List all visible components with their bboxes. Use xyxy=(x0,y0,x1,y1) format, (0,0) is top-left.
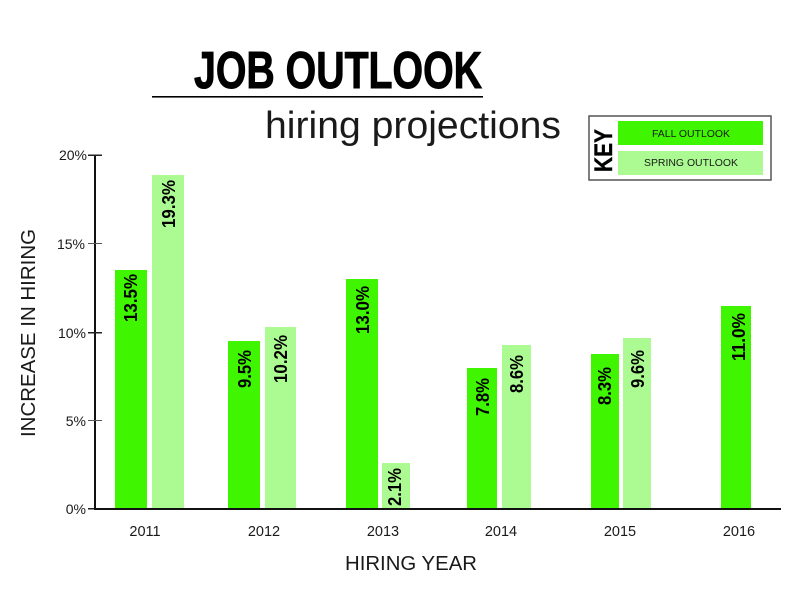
year group 2012 xyxy=(228,327,296,540)
title: JOB OUTLOOK xyxy=(194,42,482,100)
year group 2015: 8.3% xyxy=(595,367,615,405)
year group 2016: 2016 xyxy=(723,524,755,540)
year group 2014: 7.8% xyxy=(473,378,493,416)
y axis: 10% xyxy=(58,325,86,341)
y axis: 0% xyxy=(66,501,86,517)
key heading: KEY xyxy=(590,129,618,172)
y axis xyxy=(57,147,102,517)
y axis: 5% xyxy=(66,413,86,429)
year group 2013 xyxy=(346,279,410,540)
year group 2011 xyxy=(115,175,184,540)
y axis: 20% xyxy=(59,147,87,163)
year group 2013: 13.0% xyxy=(353,286,373,334)
year group 2016 xyxy=(721,306,755,540)
legend key xyxy=(589,116,771,180)
year group 2011: 19.3% xyxy=(159,180,179,228)
year group 2013: 2013 xyxy=(367,524,399,540)
y axis title: INCREASE IN HIRING xyxy=(18,229,40,437)
year group 2011: 13.5% xyxy=(121,274,141,322)
year group 2015: 2015 xyxy=(604,524,636,540)
year group 2014: 2014 xyxy=(485,524,517,540)
year group 2016: 11.0% xyxy=(729,313,749,361)
year group 2015 xyxy=(591,338,651,540)
legend item: spring outlook: SPRING OUTLOOK xyxy=(644,158,738,169)
year group 2012: 2012 xyxy=(248,524,280,540)
year group 2014 xyxy=(467,345,531,540)
year group 2013: 2.1% xyxy=(385,468,405,506)
year group 2012: 9.5% xyxy=(235,350,255,388)
year group 2015: 9.6% xyxy=(628,350,648,388)
year group 2012: 10.2% xyxy=(271,335,291,383)
legend item: spring outlook xyxy=(618,151,763,175)
x axis xyxy=(94,508,781,510)
year group 2014: 8.6% xyxy=(507,355,527,393)
legend item: fall outlook: FALL OUTLOOK xyxy=(652,129,730,140)
y axis: 15% xyxy=(57,236,85,252)
legend item: fall outlook xyxy=(618,121,763,145)
x axis title: HIRING YEAR xyxy=(345,553,477,575)
year group 2011: 2011 xyxy=(129,524,161,540)
subtitle: hiring projections xyxy=(265,105,561,147)
